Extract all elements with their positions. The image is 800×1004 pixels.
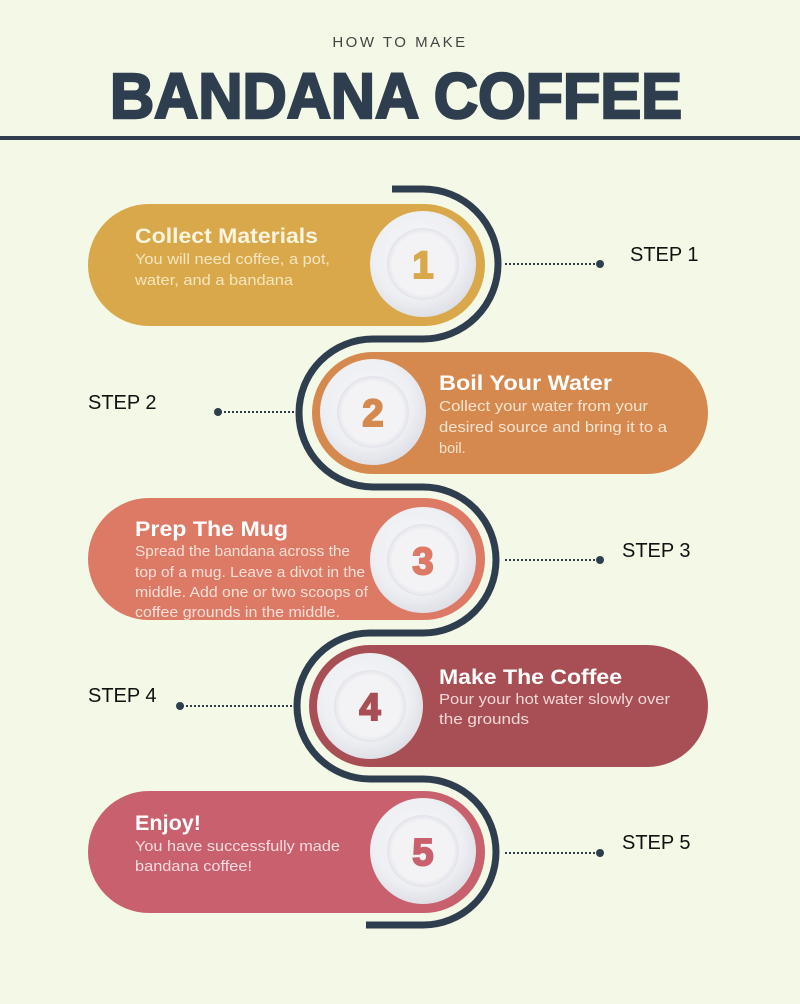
circle 1 [370, 211, 476, 317]
circle 5: 5 [412, 832, 434, 874]
step 4 text: Make The Coffee [439, 666, 622, 689]
step 4 text: Pour your hot water slowly over [439, 692, 670, 708]
connector 5 [505, 849, 604, 857]
step 1 text: water, and a bandana [134, 273, 294, 289]
serpentine line [297, 189, 498, 925]
step 4 text: the grounds [439, 712, 529, 728]
step labels: STEP 4 [88, 685, 157, 707]
step 1 text [134, 225, 330, 289]
connector 1 [505, 260, 604, 268]
step 4 text [439, 666, 670, 728]
connector 3 [505, 556, 604, 564]
step 3 text: Prep The Mug [135, 518, 288, 541]
step 5 text: You have successfully made [135, 839, 340, 855]
circle 3 [370, 507, 476, 613]
step 3 text: top of a mug. Leave a divot in the [135, 565, 365, 581]
step labels: STEP 3 [622, 540, 691, 562]
step 3 text: middle. Add one or two scoops of [135, 585, 369, 601]
step 2 text [439, 372, 668, 457]
circle 3: 3 [412, 541, 434, 583]
step labels: STEP 2 [88, 392, 157, 414]
circle 2: 2 [362, 393, 384, 435]
step 2 text: Collect your water from your [439, 399, 648, 415]
step 5 text: Enjoy! [135, 812, 201, 835]
step 3 text: Spread the bandana across the [135, 544, 350, 560]
circle 2 [320, 359, 426, 465]
step 1 text: You will need coffee, a pot, [135, 252, 330, 268]
step 2 text: boil. [439, 441, 466, 457]
step 2 text: desired source and bring it to a [439, 420, 668, 436]
step 5 text [135, 812, 340, 875]
step labels: STEP 1 [630, 244, 699, 266]
step labels: STEP 5 [622, 832, 691, 854]
step 3 text: coffee grounds in the middle. [135, 605, 340, 621]
connector 4 [176, 702, 298, 710]
circle 5 [370, 798, 476, 904]
step labels [88, 244, 699, 854]
pills [88, 204, 708, 913]
step 2 text: Boil Your Water [439, 372, 612, 395]
subtitle: HOW TO MAKE [332, 34, 468, 51]
circle 4 [317, 653, 423, 759]
step 1 text: Collect Materials [135, 225, 318, 248]
title: BANDANA COFFEE [110, 60, 682, 132]
circle 4: 4 [359, 687, 381, 729]
connector 2 [214, 408, 300, 416]
circle 1: 1 [412, 245, 434, 287]
step 5 text: bandana coffee! [135, 859, 252, 875]
step 3 text [135, 518, 369, 621]
